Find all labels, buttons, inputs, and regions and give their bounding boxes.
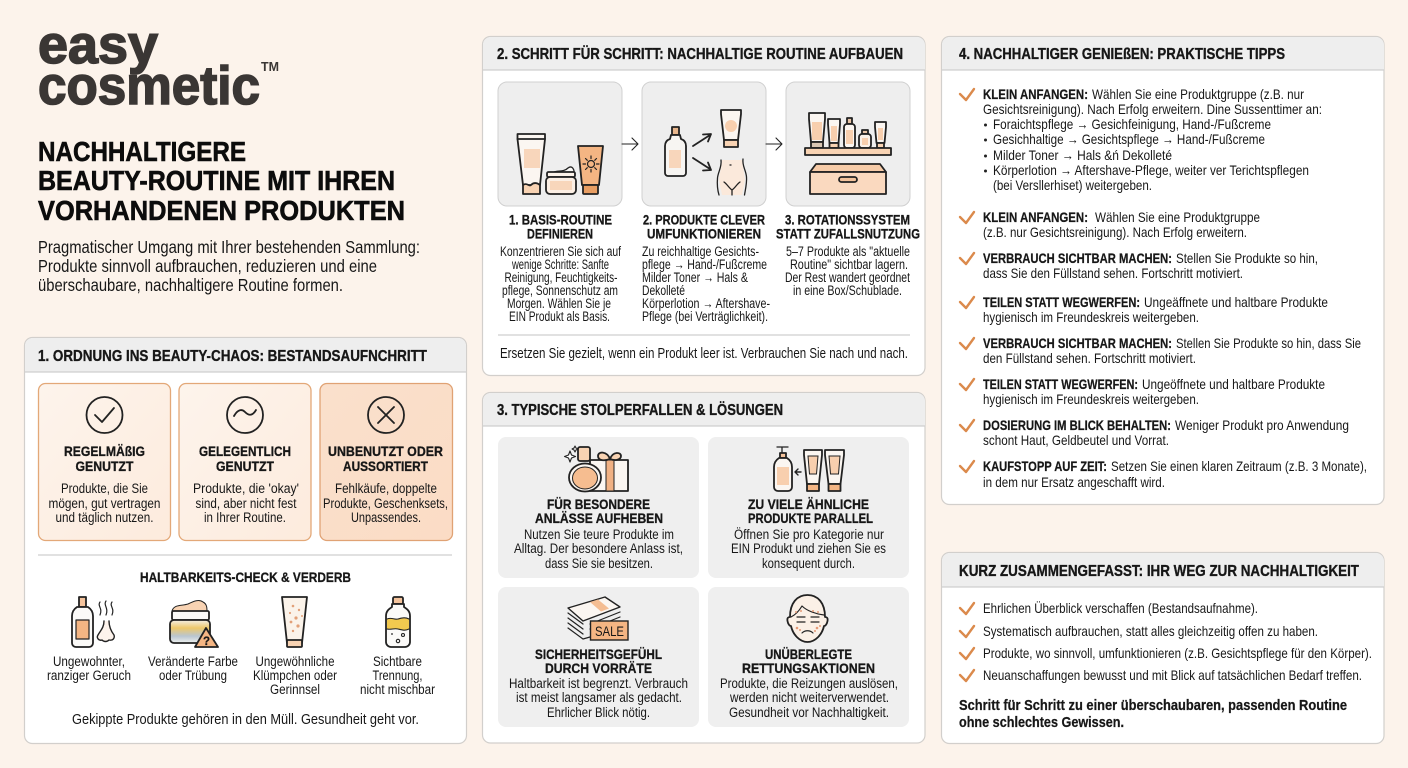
tip 8: KAUFSTOPP AUF ZEIT: bbox=[983, 458, 1107, 474]
title: NACHHALTIGERE bbox=[38, 136, 246, 167]
step 1 text: pflege, Sonnenschutz am bbox=[502, 283, 618, 298]
card: besondere Anlässe: Alltag. Der besondere Anlass ist, bbox=[514, 541, 683, 556]
panel: Kurz zusammengefasst bbox=[942, 552, 1384, 744]
panel 1: Ordnung ins Beauty-Chaos bbox=[24, 338, 466, 744]
card: besondere Anlässe bbox=[498, 437, 699, 578]
step 3 text bbox=[776, 212, 920, 298]
step 2 text: Milder Toner → Hals & bbox=[642, 270, 748, 285]
illustration: basis products bbox=[498, 82, 622, 206]
note: Gekippte Produkte: Gekippte Produkte gehören in den Müll. Gesundheit geht vor. bbox=[72, 711, 419, 728]
subheading: Haltbarkeits-Check: HALTBARKEITS-CHECK & VERDERB bbox=[140, 570, 351, 585]
card: regelmäßig genutzt: mögen, gut vertragen bbox=[48, 496, 160, 511]
card: Rettungsaktionen: Produkte, die Reizungen auslösen, bbox=[720, 676, 898, 691]
panel 4: Praktische Tipps bbox=[942, 36, 1384, 504]
tip 3 bbox=[960, 250, 1318, 281]
step 3 text: 5–7 Produkte als "aktuelle bbox=[786, 244, 910, 259]
step 2 text: 2. PRODUKTE CLEVER bbox=[643, 212, 765, 228]
step 3 text: STATT ZUFALLSNUTZUNG bbox=[776, 226, 920, 242]
card: Rettungsaktionen bbox=[708, 587, 909, 727]
card: regelmäßig genutzt bbox=[38, 384, 170, 540]
icon: bottle and nose bbox=[72, 597, 114, 647]
step 1 text: Morgen. Wählen Sie je bbox=[507, 296, 611, 311]
card: Vorräte: Haltbarkeit ist begrenzt. Verbrauch bbox=[509, 676, 688, 691]
card: besondere Anlässe: Nutzen Sie teure Produkte im bbox=[524, 527, 674, 542]
step 1 text: DEFINIEREN bbox=[527, 226, 593, 242]
tip 4: TEILEN STATT WEGWERFEN: bbox=[983, 294, 1140, 310]
card: unbenutzt oder aussortiert: Produkte, Geschenksets, bbox=[323, 496, 448, 511]
tip 5: Stellen Sie Produkte so hin, dass Sie bbox=[1176, 335, 1361, 351]
card: regelmäßig genutzt: und täglich nutzen. bbox=[56, 510, 154, 525]
arrow bbox=[766, 138, 782, 150]
heading: summary: KURZ ZUSAMMENGEFASST: IHR WEG ZUR NACHHALTIGKEIT bbox=[959, 563, 1359, 580]
card: Vorräte: SICHERHEITSGEFÜHL bbox=[535, 647, 662, 662]
step 2 text: Dekolleté bbox=[642, 283, 685, 298]
panel 3: Stolperfallen bbox=[482, 392, 925, 743]
tip 1 with bullets: Milder Toner → Hals &ń Dekolleté bbox=[993, 147, 1172, 163]
tip 1 with bullets: Gesichhaltige → Gesichtspflege → Hand-/Fußcreme bbox=[993, 131, 1265, 147]
logo: easy cosmetic bbox=[38, 15, 279, 116]
tip 7 bbox=[960, 417, 1349, 448]
heading 2: 2. SCHRITT FÜR SCHRITT: NACHHALTIGE ROUTINE AUFBAUEN bbox=[497, 46, 903, 63]
card: gelegentlich genutzt: in Ihrer Routine. bbox=[204, 510, 286, 525]
label: Klümpchen bbox=[253, 654, 337, 697]
logo: easy cosmetic: TM bbox=[261, 60, 279, 74]
step 1 text: wenige Schritte: Sanfte bbox=[511, 257, 609, 272]
card: ähnliche Produkte bbox=[708, 437, 909, 578]
label: Farbe: Veränderte Farbe bbox=[148, 654, 238, 669]
tip 3: Stellen Sie Produkte so hin, bbox=[1176, 250, 1318, 266]
tip 7: Weniger Produkt pro Anwendung bbox=[1175, 417, 1349, 433]
icon: jar with warning bbox=[170, 601, 218, 648]
card: Rettungsaktionen: UNÜBERLEGTE bbox=[765, 647, 852, 662]
card: besondere Anlässe: FÜR BESONDERE bbox=[547, 497, 650, 512]
arrow bbox=[622, 138, 638, 150]
intro text: überschaubare, nachhaltigere Routine formen. bbox=[38, 275, 343, 295]
label: Klümpchen: Gerinnsel bbox=[270, 682, 320, 697]
card: regelmäßig genutzt: REGELMÄßIG bbox=[64, 444, 145, 459]
card: unbenutzt oder aussortiert: UNBENUTZT ODER bbox=[328, 444, 443, 459]
tip 6 bbox=[960, 376, 1325, 407]
card: gelegentlich genutzt: GELEGENTLICH bbox=[199, 444, 291, 459]
heading 1: 1. ORDNUNG INS BEAUTY-CHAOS: BESTANDSAUFNCHRITT bbox=[38, 348, 427, 365]
card: regelmäßig genutzt: Produkte, die Sie bbox=[61, 481, 148, 496]
note: Ersetzen: Ersetzen Sie gezielt, wenn ein Produkt leer ist. Verbrauchen Sie nach und nach. bbox=[500, 346, 908, 362]
label: Klümpchen: Ungewöhnliche bbox=[256, 654, 334, 669]
logo: easy cosmetic: cosmetic bbox=[38, 56, 260, 116]
step 1 text: 1. BASIS-ROUTINE bbox=[509, 212, 612, 228]
tip 5: VERBRAUCH SICHTBAR MACHEN: bbox=[983, 335, 1172, 351]
tip 1 with bullets: Körperlotion → Aftershave-Pflege, weiter ver Terichtspflegen bbox=[993, 162, 1309, 178]
title bbox=[38, 136, 405, 226]
label: Trennung bbox=[360, 654, 435, 697]
card: Vorräte: Ehrlicher Blick nötig. bbox=[547, 705, 650, 720]
step 3 text: in eine Box/Schublade. bbox=[793, 283, 902, 298]
card: Rettungsaktionen: werden nicht weiterverwendet. bbox=[729, 690, 889, 705]
icon: jar with warning: ? bbox=[203, 636, 210, 648]
card: ähnliche Produkte: konsequent durch. bbox=[762, 556, 855, 571]
card: ähnliche Produkte: PRODUKTE PARALLEL bbox=[748, 511, 873, 526]
tip 3: VERBRAUCH SICHTBAR MACHEN: bbox=[983, 250, 1172, 266]
tip 1 with bullets: (bei Versllerhiset) weitergeben. bbox=[993, 177, 1152, 193]
tip 1 with bullets bbox=[960, 86, 1322, 193]
card: gelegentlich genutzt: GENUTZT bbox=[216, 459, 275, 474]
illustration: shelf and drawer bbox=[786, 82, 910, 206]
tip 4: hygienisch im Freundeskreis weitergeben. bbox=[983, 309, 1199, 325]
card: Vorräte bbox=[498, 587, 699, 727]
step 2 text: UMFUNKTIONIEREN bbox=[647, 226, 761, 242]
icon: tube with clumps bbox=[282, 597, 307, 647]
label: Farbe: oder Trübung bbox=[159, 668, 227, 683]
step 1 text bbox=[500, 212, 621, 324]
summary item 1: Ehrlichen Überblick verschaffen (Bestandsaufnahme). bbox=[983, 599, 1258, 616]
tip 1 with bullets: Gesichtsreinigung). Nach Erfolg erweitern. Dine Sussenttimer an: bbox=[983, 101, 1322, 117]
tip 7: DOSIERUNG IM BLICK BEHALTEN: bbox=[983, 417, 1171, 433]
card: regelmäßig genutzt: GENUTZT bbox=[76, 459, 134, 474]
panel 2: Schritt für Schritt bbox=[482, 36, 925, 376]
step 2 text bbox=[642, 212, 770, 324]
card: gelegentlich genutzt: Produkte, die 'okay' bbox=[193, 481, 299, 496]
tip 4 bbox=[960, 294, 1328, 325]
label: Geruch: Ungewohnter, bbox=[53, 654, 125, 669]
card: unbenutzt oder aussortiert bbox=[320, 384, 452, 540]
heading 4: 4. NACHHALTIGER GENIEßEN: PRAKTISCHE TIPPS bbox=[959, 46, 1285, 63]
step 3 text: Routine" sichtbar lagern. bbox=[790, 257, 908, 272]
label: Trennung: Sichtbare bbox=[373, 654, 422, 669]
illustration: repurposing products bbox=[642, 82, 766, 206]
closing statement: Schritt für Schritt zu einer überschaubaren, passenden Routine bbox=[959, 697, 1347, 714]
tip 7: schont Haut, Geldbeutel und Vorrat. bbox=[983, 432, 1169, 448]
tip 1 with bullets: Wählen Sie eine Produktgruppe (z.B. nur bbox=[1092, 86, 1304, 102]
card: besondere Anlässe: dass Sie sie besitzen. bbox=[545, 556, 653, 571]
icon: stack with sale tag bbox=[568, 597, 628, 640]
card: besondere Anlässe: ANLÄSSE AUFHEBEN bbox=[535, 511, 663, 526]
card: unbenutzt oder aussortiert: AUSSORTIERT bbox=[343, 459, 429, 474]
icon: perfume and gift bbox=[564, 446, 628, 492]
tip 5 bbox=[960, 335, 1361, 366]
intro text: Produkte sinnvoll aufbrauchen, reduzieren und eine bbox=[38, 256, 377, 276]
icon: irritated face bbox=[787, 595, 828, 642]
tip 5: den Füllstand sehen. Fortschritt motiviert. bbox=[983, 350, 1196, 366]
tip 1 with bullets: Foraichtspflege → Gesichfeinigung, Hand-/Fußcreme bbox=[993, 116, 1271, 132]
summary item 2: Systematisch aufbrauchen, statt alles gleichzeitig offen zu haben. bbox=[983, 623, 1318, 639]
card: Vorräte: ist meist langsamer als gedacht. bbox=[516, 690, 682, 705]
intro text: Pragmatischer Umgang mit Ihrer bestehenden Sammlung: bbox=[38, 237, 420, 257]
step 3 text: Der Rest wandert geordnet bbox=[785, 270, 910, 285]
label: Trennung: Trennung, bbox=[372, 668, 422, 683]
card: Vorräte: DURCH VORRÄTE bbox=[545, 661, 652, 676]
icon: pump bottle and tubes bbox=[774, 447, 844, 491]
tip 2: KLEIN ANFANGEN: bbox=[983, 209, 1088, 225]
card: ähnliche Produkte: EIN Produkt und ziehen Sie es bbox=[731, 541, 886, 556]
title: BEAUTY-ROUTINE MIT IHREN bbox=[38, 165, 395, 196]
step 1 text: Reinigung, Feuchtigkeits- bbox=[504, 270, 618, 285]
card: ähnliche Produkte: ZU VIELE ÄHNLICHE bbox=[748, 497, 869, 512]
title: VORHANDENEN PRODUKTEN bbox=[38, 195, 405, 226]
tip 6: TEILEN STATT WEGWERFEN: bbox=[983, 376, 1138, 392]
label: Farbe bbox=[148, 654, 238, 683]
tip 6: hygienisch im Freundeskreis weitergeben. bbox=[983, 391, 1199, 407]
tip 2: Wählen Sie eine Produktgruppe bbox=[1095, 209, 1260, 225]
tip 6: Ungeöffnete und haltbare Produkte bbox=[1142, 376, 1325, 392]
icon: separated bottle bbox=[386, 597, 410, 647]
card: unbenutzt oder aussortiert: Fehlkäufe, doppelte bbox=[335, 481, 437, 496]
tip 8: in dem nur Ersatz angeschafft wird. bbox=[983, 474, 1165, 490]
label: Geruch bbox=[47, 654, 131, 683]
card: unbenutzt oder aussortiert: Unpassendes. bbox=[351, 510, 421, 525]
step 2 text: Körperlotion → Aftershave- bbox=[642, 296, 770, 311]
label: Trennung: nicht mischbar bbox=[360, 682, 435, 697]
step 2 text: Pflege (bei Verträglichkeit). bbox=[642, 309, 768, 324]
step 2 text: pflege → Hand-/Fußcreme bbox=[642, 257, 767, 272]
step 1 text: Konzentrieren Sie sich auf bbox=[500, 244, 621, 259]
card: gelegentlich genutzt bbox=[179, 384, 311, 540]
tip 2: (z.B. nur Gesichtsreinigung). Nach Erfolg erweitern. bbox=[983, 224, 1247, 240]
icon: stack with sale tag: SALE bbox=[595, 623, 624, 639]
tip 1 with bullets: KLEIN ANFANGEN: bbox=[983, 86, 1088, 102]
label: Klümpchen: Klümpchen oder bbox=[253, 668, 337, 683]
card: gelegentlich genutzt: sind, aber nicht fest bbox=[196, 496, 297, 511]
tip 4: Ungeäffnete und haltbare Produkte bbox=[1144, 294, 1328, 310]
step 1 text: EIN Produkt als Basis. bbox=[509, 309, 610, 324]
card: Rettungsaktionen: Gesundheit vor Nachhaltigkeit. bbox=[729, 705, 889, 720]
card: Rettungsaktionen: RETTUNGSAKTIONEN bbox=[742, 661, 875, 676]
card: ähnliche Produkte: Öffnen Sie pro Kategorie nur bbox=[734, 527, 884, 542]
step 2 text: Zu reichhaltige Gesichts- bbox=[642, 244, 759, 259]
tip 2 bbox=[960, 209, 1260, 240]
heading 3: 3. TYPISCHE STOLPERFALLEN & LÖSUNGEN bbox=[497, 402, 783, 419]
logo: easy cosmetic: easy bbox=[38, 15, 158, 75]
intro text bbox=[38, 237, 420, 295]
tip 8 bbox=[960, 458, 1367, 490]
tip 3: dass Sie den Füllstand sehen. Fortschritt motiviert. bbox=[983, 265, 1243, 281]
step 3 text: 3. ROTATIONSSYSTEM bbox=[785, 212, 910, 228]
closing statement bbox=[959, 697, 1347, 731]
closing statement: ohne schlechtes Gewissen. bbox=[959, 714, 1124, 731]
label: Geruch: ranziger Geruch bbox=[47, 668, 131, 683]
